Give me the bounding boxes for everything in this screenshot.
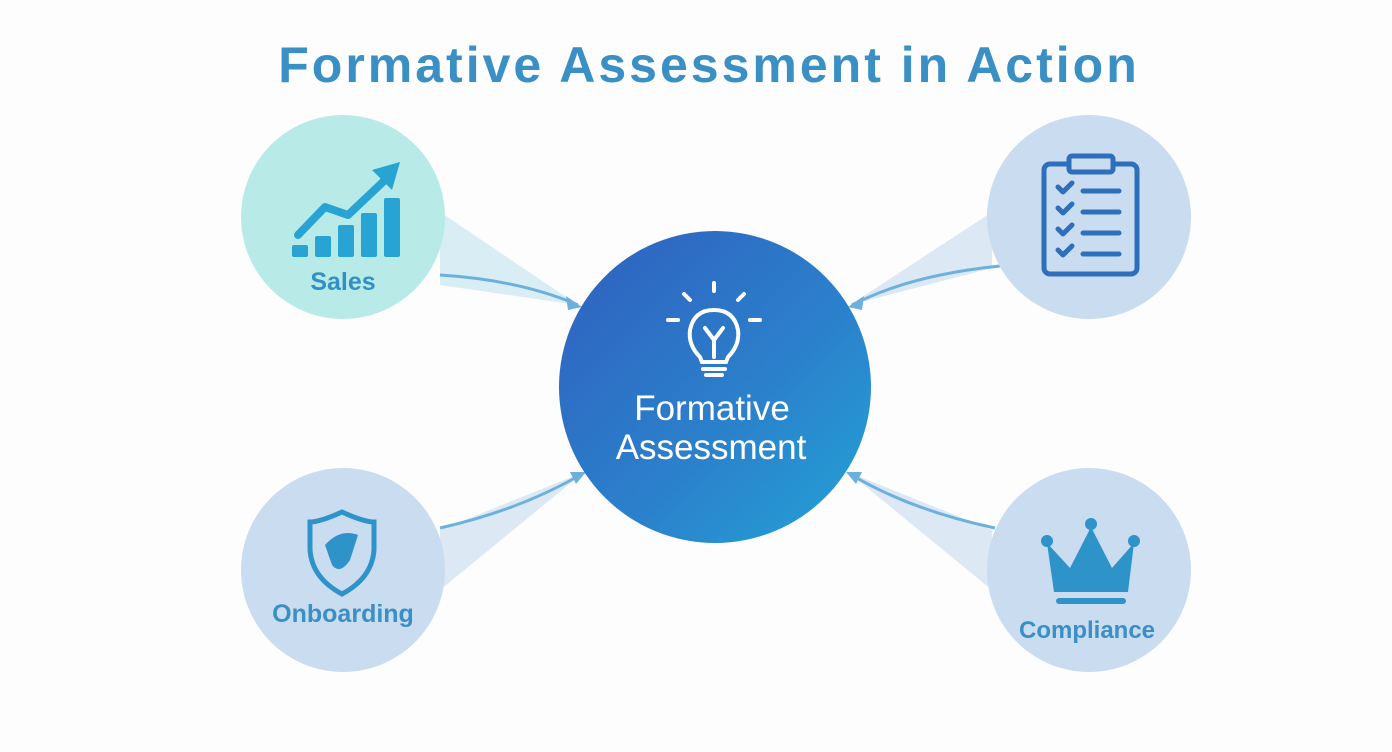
label: compliance: Compliance [1019,617,1155,644]
circle: checklist [987,115,1191,319]
central circle [559,231,871,543]
icon: bar chart growth [292,162,400,257]
label: center: Formative [634,389,790,428]
label: sales: Sales [310,268,376,296]
title: Formative Assessment in Action [278,37,1140,93]
icon: crown [1041,518,1140,604]
icon: clipboard [1044,156,1137,274]
beam: sales [440,212,582,310]
central circle: Assessment [616,428,807,467]
icon: lightbulb [668,283,760,375]
label: onboarding: Onboarding [272,600,414,628]
circle: sales [241,115,445,319]
circle: onboarding [241,468,445,672]
beam: checklist [848,212,1000,310]
beam: compliance [846,472,995,590]
circle: compliance [987,468,1191,672]
beam: onboarding [440,472,586,590]
icon: shield [310,512,374,594]
